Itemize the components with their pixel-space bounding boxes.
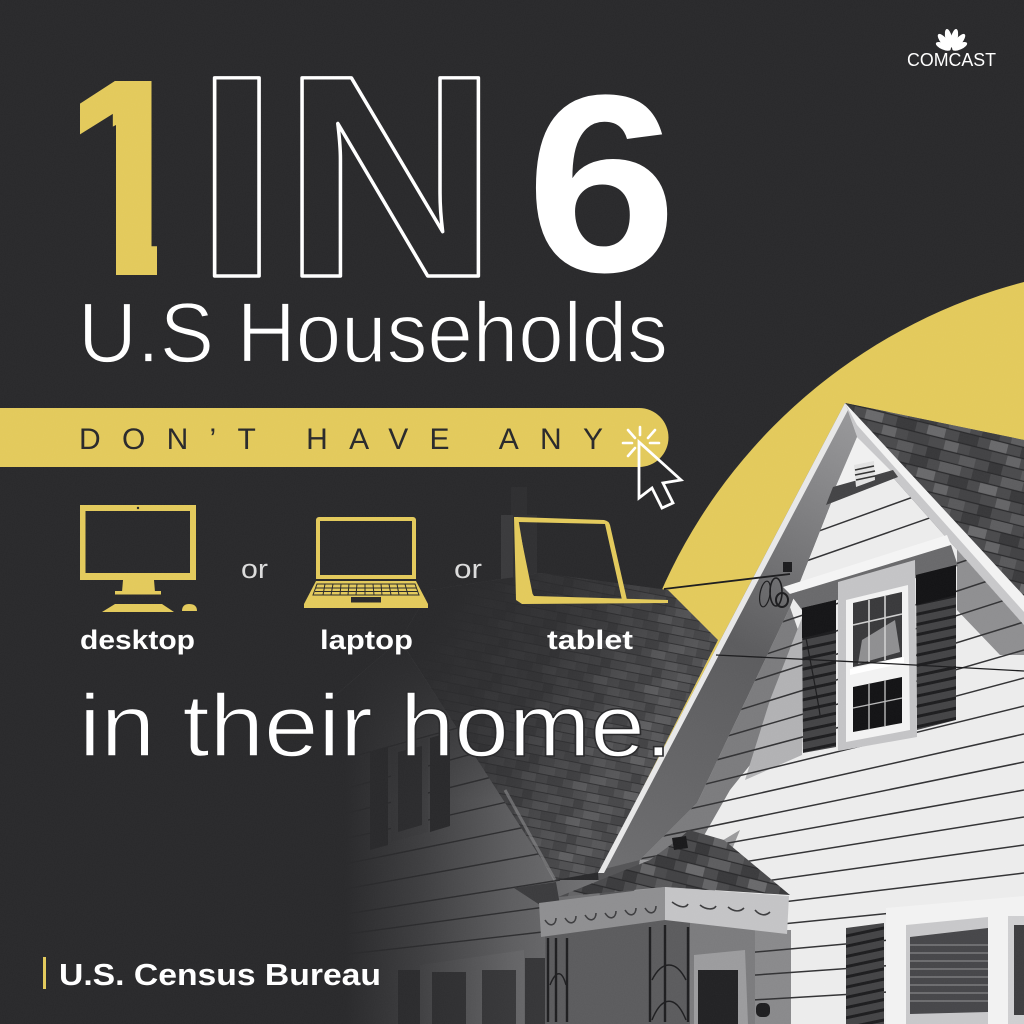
icon: laptop [304,517,428,608]
closing line: in their home.: in their home. [79,676,672,775]
rear house: chimney [501,487,537,611]
big outlined word IN: I [194,16,280,338]
label: laptop: laptop [320,625,413,655]
front house: gable trim [598,403,1024,873]
icon: tablet on stand [514,517,668,604]
big number 6: 6 [526,42,677,325]
front house: attic vent [826,437,898,505]
porch fascia right [665,887,789,934]
rear house: roof [400,573,718,880]
porch roof [558,830,790,897]
left shutter [802,600,836,753]
porch door [694,950,748,1024]
upper sash glass [853,592,902,667]
label: or: or [241,554,268,584]
logo: Comcast [907,28,996,70]
window frame [838,560,917,751]
yellow circle backdrop [615,282,1024,1024]
front house: wall with siding [600,437,1024,1024]
overhead wires and cable knot [664,562,1024,715]
yellow banner [0,408,668,467]
front house: dormer window [802,560,956,753]
siding lines [640,497,1024,1001]
source: U.S. Census Bureau: U.S. Census Bureau [59,957,381,992]
subheading: U.S Households: U.S Households [78,286,668,381]
porch wall [545,920,755,1024]
porch columns [548,925,688,1022]
logo peacock feathers [935,28,968,53]
logo wordmark: COMCAST [907,50,996,70]
porch fascia left [539,887,665,937]
rear house: upper window [370,732,450,850]
front house: backing [598,403,1024,1024]
icon: desktop [80,505,197,612]
porch lamp [756,1003,770,1017]
rear house: lower windows [398,958,545,1024]
banner text: DON’T HAVE ANY [79,423,603,456]
front house: roof shingles [845,403,1024,605]
rear house: wall [334,644,600,1024]
front house: lower right shutter [846,923,884,1024]
porch [514,830,790,1024]
label: tablet: tablet [547,625,633,655]
front house: overhang band [783,535,958,610]
source divider [43,957,46,989]
big outlined word IN [194,16,499,338]
lower sash glass [853,677,902,732]
big number 1: 1 [47,20,204,335]
front house: lower right window [886,896,1024,1024]
sash rail [850,657,904,675]
rear wall fade at top [354,642,482,768]
icon: cursor with click sparkle [623,427,681,508]
wall shadows [600,548,1024,1024]
label: desktop: desktop [80,625,195,655]
big outlined word IN: N [282,16,499,338]
right shutter [916,565,956,730]
porch eave corner of rear roof [514,882,560,905]
rear wall fade to background [330,644,568,1024]
label: or: or [454,554,482,584]
